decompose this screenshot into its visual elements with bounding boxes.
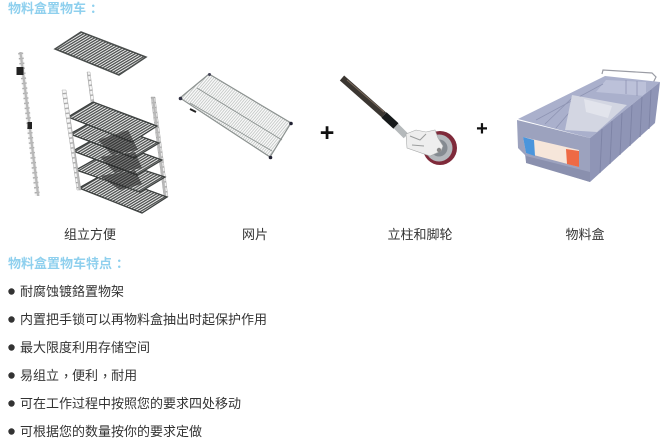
caption: mesh: 网片 <box>242 227 268 242</box>
title: product name: 物料盒置物车 ： <box>8 1 103 16</box>
feature 4: ， <box>63 365 76 380</box>
illustration: post and caster <box>342 78 457 165</box>
feature 5: 可在工作过程中按照您的要求四处移动 <box>20 396 241 411</box>
feature list <box>8 284 267 439</box>
sleeve <box>384 115 396 126</box>
shelves: five stacked wire shelves <box>68 102 167 213</box>
feature 4 <box>8 365 137 383</box>
feature 4: 便利 <box>72 368 98 383</box>
handle <box>602 70 656 83</box>
interior back and left walls <box>518 76 660 138</box>
plus sign: + <box>476 118 488 140</box>
post: loose ladder post <box>16 52 40 196</box>
post: front upright <box>62 90 81 190</box>
feature 2: 内置把手锁可以再物料盒抽出时起保护作用 <box>20 312 267 327</box>
illustration: assembled rack parts <box>16 32 168 213</box>
feature 4: 耐用 <box>111 368 137 383</box>
caption: post and caster: 立柱和脚轮 <box>387 227 453 242</box>
feature 4: ， <box>102 365 115 380</box>
feature 6: 可根据您的数量按你的要求定做 <box>20 424 202 439</box>
heading: features: 物料盒置物车特点 ： <box>8 256 129 271</box>
plus sign: + <box>320 119 334 147</box>
feature 1: 耐腐蚀镀鉻置物架 <box>20 284 124 299</box>
illustration: wire mesh shelf <box>179 73 293 159</box>
shelf: exploded top shelf <box>55 32 146 75</box>
bracket <box>406 130 443 156</box>
feature 3: 最大限度利用存储空间 <box>20 340 150 355</box>
label <box>523 137 579 167</box>
feature 4: 易组立 <box>20 368 59 383</box>
caption: easy assembly: 组立方便 <box>64 227 116 242</box>
stem <box>396 126 406 136</box>
pole <box>342 78 384 115</box>
posts: back uprights <box>87 72 168 197</box>
divider and floor <box>565 95 627 132</box>
caption: bin: 物料盒 <box>565 227 605 242</box>
wheel <box>423 131 457 165</box>
right wall <box>590 82 660 182</box>
front panel <box>517 120 590 182</box>
illustration: storage bin <box>517 70 660 182</box>
